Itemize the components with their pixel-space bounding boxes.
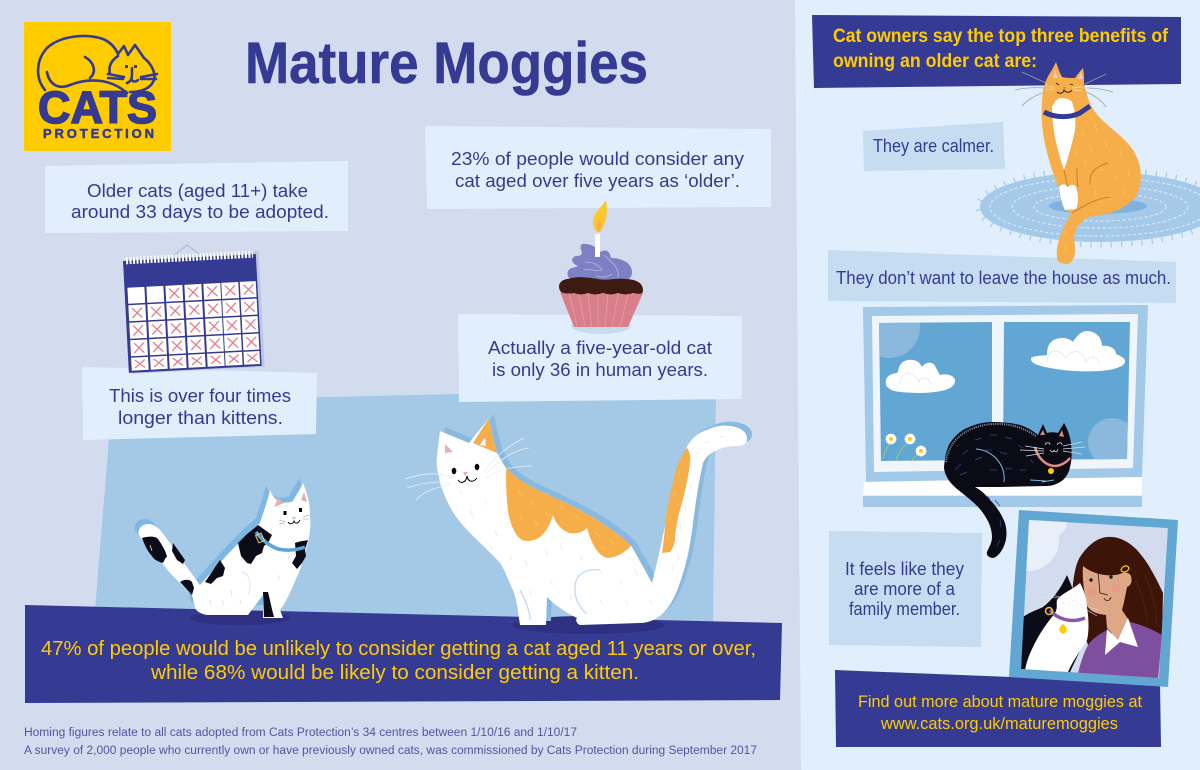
bottom band: statistic xyxy=(25,605,782,703)
footnotes xyxy=(24,727,757,757)
text box: 23 percent: 23% of people would consider any xyxy=(451,148,745,169)
text box: calmer: They are calmer. xyxy=(873,135,994,156)
black cat haunch xyxy=(976,449,1054,482)
text box: family member: family member. xyxy=(849,598,960,619)
small cat shadow xyxy=(134,478,306,605)
small cat black patches xyxy=(142,525,308,617)
cloud right xyxy=(1031,331,1125,371)
cupcake case xyxy=(560,292,643,327)
text box: calmer xyxy=(863,122,1005,171)
call to action band: www.cats.org.uk/maturemoggies xyxy=(880,714,1118,733)
logo wordmark: CATS xyxy=(38,82,157,133)
window pane left xyxy=(879,322,992,461)
photo background xyxy=(1021,520,1168,678)
cat face and whiskers xyxy=(1034,592,1098,616)
ground shadows xyxy=(512,616,664,634)
small cat face xyxy=(284,508,302,515)
candle flame xyxy=(593,200,607,232)
black cat face xyxy=(1045,443,1062,452)
woman shirt collar xyxy=(1105,618,1138,655)
hair clip xyxy=(1120,565,1130,573)
large cat fur strokes on patches xyxy=(518,470,680,549)
window frame xyxy=(863,305,1148,482)
daisies xyxy=(883,434,926,460)
text box: human years: is only 36 in human years. xyxy=(492,359,708,380)
illustration: window xyxy=(858,296,1148,507)
ginger cat limb lines xyxy=(1064,163,1110,213)
call to action band xyxy=(835,670,1161,747)
ginger cat inner whiskers xyxy=(1046,86,1082,91)
black cat whiskers xyxy=(1020,442,1085,456)
calendar crosses xyxy=(131,284,257,368)
illustration: ginger cat on rug xyxy=(1015,62,1141,264)
text box: adoption time xyxy=(45,161,348,233)
ginger cat chest xyxy=(1052,98,1075,170)
cloud left xyxy=(886,360,955,393)
ginger cat body xyxy=(1042,62,1141,264)
woman features xyxy=(1098,572,1111,601)
large cat ears inner xyxy=(445,438,486,453)
illustration: rug xyxy=(978,169,1200,245)
illustration: black and white cat xyxy=(134,478,310,618)
large cat whiskers xyxy=(405,438,532,500)
text box: human years xyxy=(458,314,742,402)
illustration: black cat on sill xyxy=(944,422,1085,558)
large cat haunch line xyxy=(520,570,600,620)
large cat fur strokes xyxy=(460,436,725,605)
black cat fur strokes xyxy=(955,435,1034,546)
woman cheeks xyxy=(1088,588,1096,596)
logo cat line art xyxy=(38,36,157,93)
text box: four times longer: longer than kittens. xyxy=(118,407,283,428)
large cat shadow xyxy=(442,414,752,621)
illustration: ginger and white cat xyxy=(405,414,752,625)
text box: human years: Actually a five-year-old cat xyxy=(488,337,712,358)
window sill xyxy=(863,477,1142,495)
black cat body xyxy=(944,422,1072,558)
large cat face xyxy=(452,468,456,474)
text box: adoption time: around 33 days to be adopted. xyxy=(71,201,329,222)
calendar day cells xyxy=(127,281,260,371)
logo: Cats Protection xyxy=(24,22,171,151)
logo sub wordmark: PROTECTION xyxy=(43,126,154,141)
large cat body xyxy=(437,418,747,625)
logo eyes xyxy=(125,65,137,68)
ginger cat collar xyxy=(1044,106,1090,117)
small cat ears xyxy=(274,492,307,507)
text box: adoption time: Older cats (aged 11+) take xyxy=(87,180,308,201)
ginger cat whiskers xyxy=(1015,72,1113,107)
frosting xyxy=(568,244,632,286)
small cat whiskers xyxy=(279,515,309,524)
panel: right header: owning an older cat are: xyxy=(833,51,1037,72)
text box: four times longer xyxy=(82,367,317,440)
panel: light blue wall xyxy=(95,392,716,625)
ginger cat ears xyxy=(1053,70,1083,79)
icon: wall calendar xyxy=(123,245,265,374)
small cat haunch and fur xyxy=(150,545,290,605)
ginger cat face xyxy=(1056,83,1073,93)
text box: 23 percent: cat aged over five years as ‘older’. xyxy=(455,170,740,191)
cat black fur xyxy=(1021,575,1085,672)
icon: cupcake with candle xyxy=(559,200,643,334)
text box: leave the house xyxy=(828,250,1176,303)
illustration: framed photo of woman and cat xyxy=(997,507,1178,687)
title: Mature Moggies xyxy=(245,31,648,96)
bottom band: statistic: 47% of people would be unlikely to consider getting a cat aged 11 years or over, xyxy=(41,638,756,660)
panel: right header: Cat owners say the top three benefits of xyxy=(833,26,1169,47)
black cat ears xyxy=(1040,430,1064,437)
woman hair xyxy=(1072,537,1163,645)
text box: family member xyxy=(829,531,982,647)
photo frame xyxy=(1009,510,1178,687)
ginger cat paws xyxy=(1059,184,1078,210)
text box: four times longer: This is over four times xyxy=(109,385,291,406)
text box: leave the house: They don’t want to leave the house as much. xyxy=(836,267,1171,288)
panel: right column background xyxy=(795,0,1200,770)
window pane right xyxy=(1003,322,1130,460)
footnotes: Homing figures relate to all cats adopted from Cats Protection’s 34 centres between 1/10/16 and 1/10/17 xyxy=(24,727,577,739)
small cat collar xyxy=(256,532,305,550)
black cat collar xyxy=(1035,447,1070,466)
panel: right header xyxy=(812,15,1181,88)
bottom band: statistic: while 68% would be likely to consider getting a kitten. xyxy=(150,662,639,684)
small cat body xyxy=(138,483,310,618)
call to action band: Find out more about mature moggies at xyxy=(858,692,1142,711)
calendar hanger xyxy=(173,245,202,256)
candle xyxy=(595,234,600,257)
text box: 23 percent xyxy=(425,126,771,209)
footnotes: A survey of 2,000 people who currently own or have previously owned cats, was commissioned by Cats Protection during September 2017 xyxy=(24,745,757,757)
woman sweater xyxy=(1078,622,1162,680)
text box: family member: are more of a xyxy=(854,578,956,599)
cat white fur xyxy=(1025,583,1088,672)
text box: family member: It feels like they xyxy=(845,558,965,579)
woman face and neck xyxy=(1083,566,1132,640)
large cat orange patches xyxy=(473,418,690,558)
chocolate sponge xyxy=(559,277,643,294)
cat collar and tag xyxy=(1050,610,1085,620)
ginger cat fur strokes xyxy=(1060,75,1129,251)
